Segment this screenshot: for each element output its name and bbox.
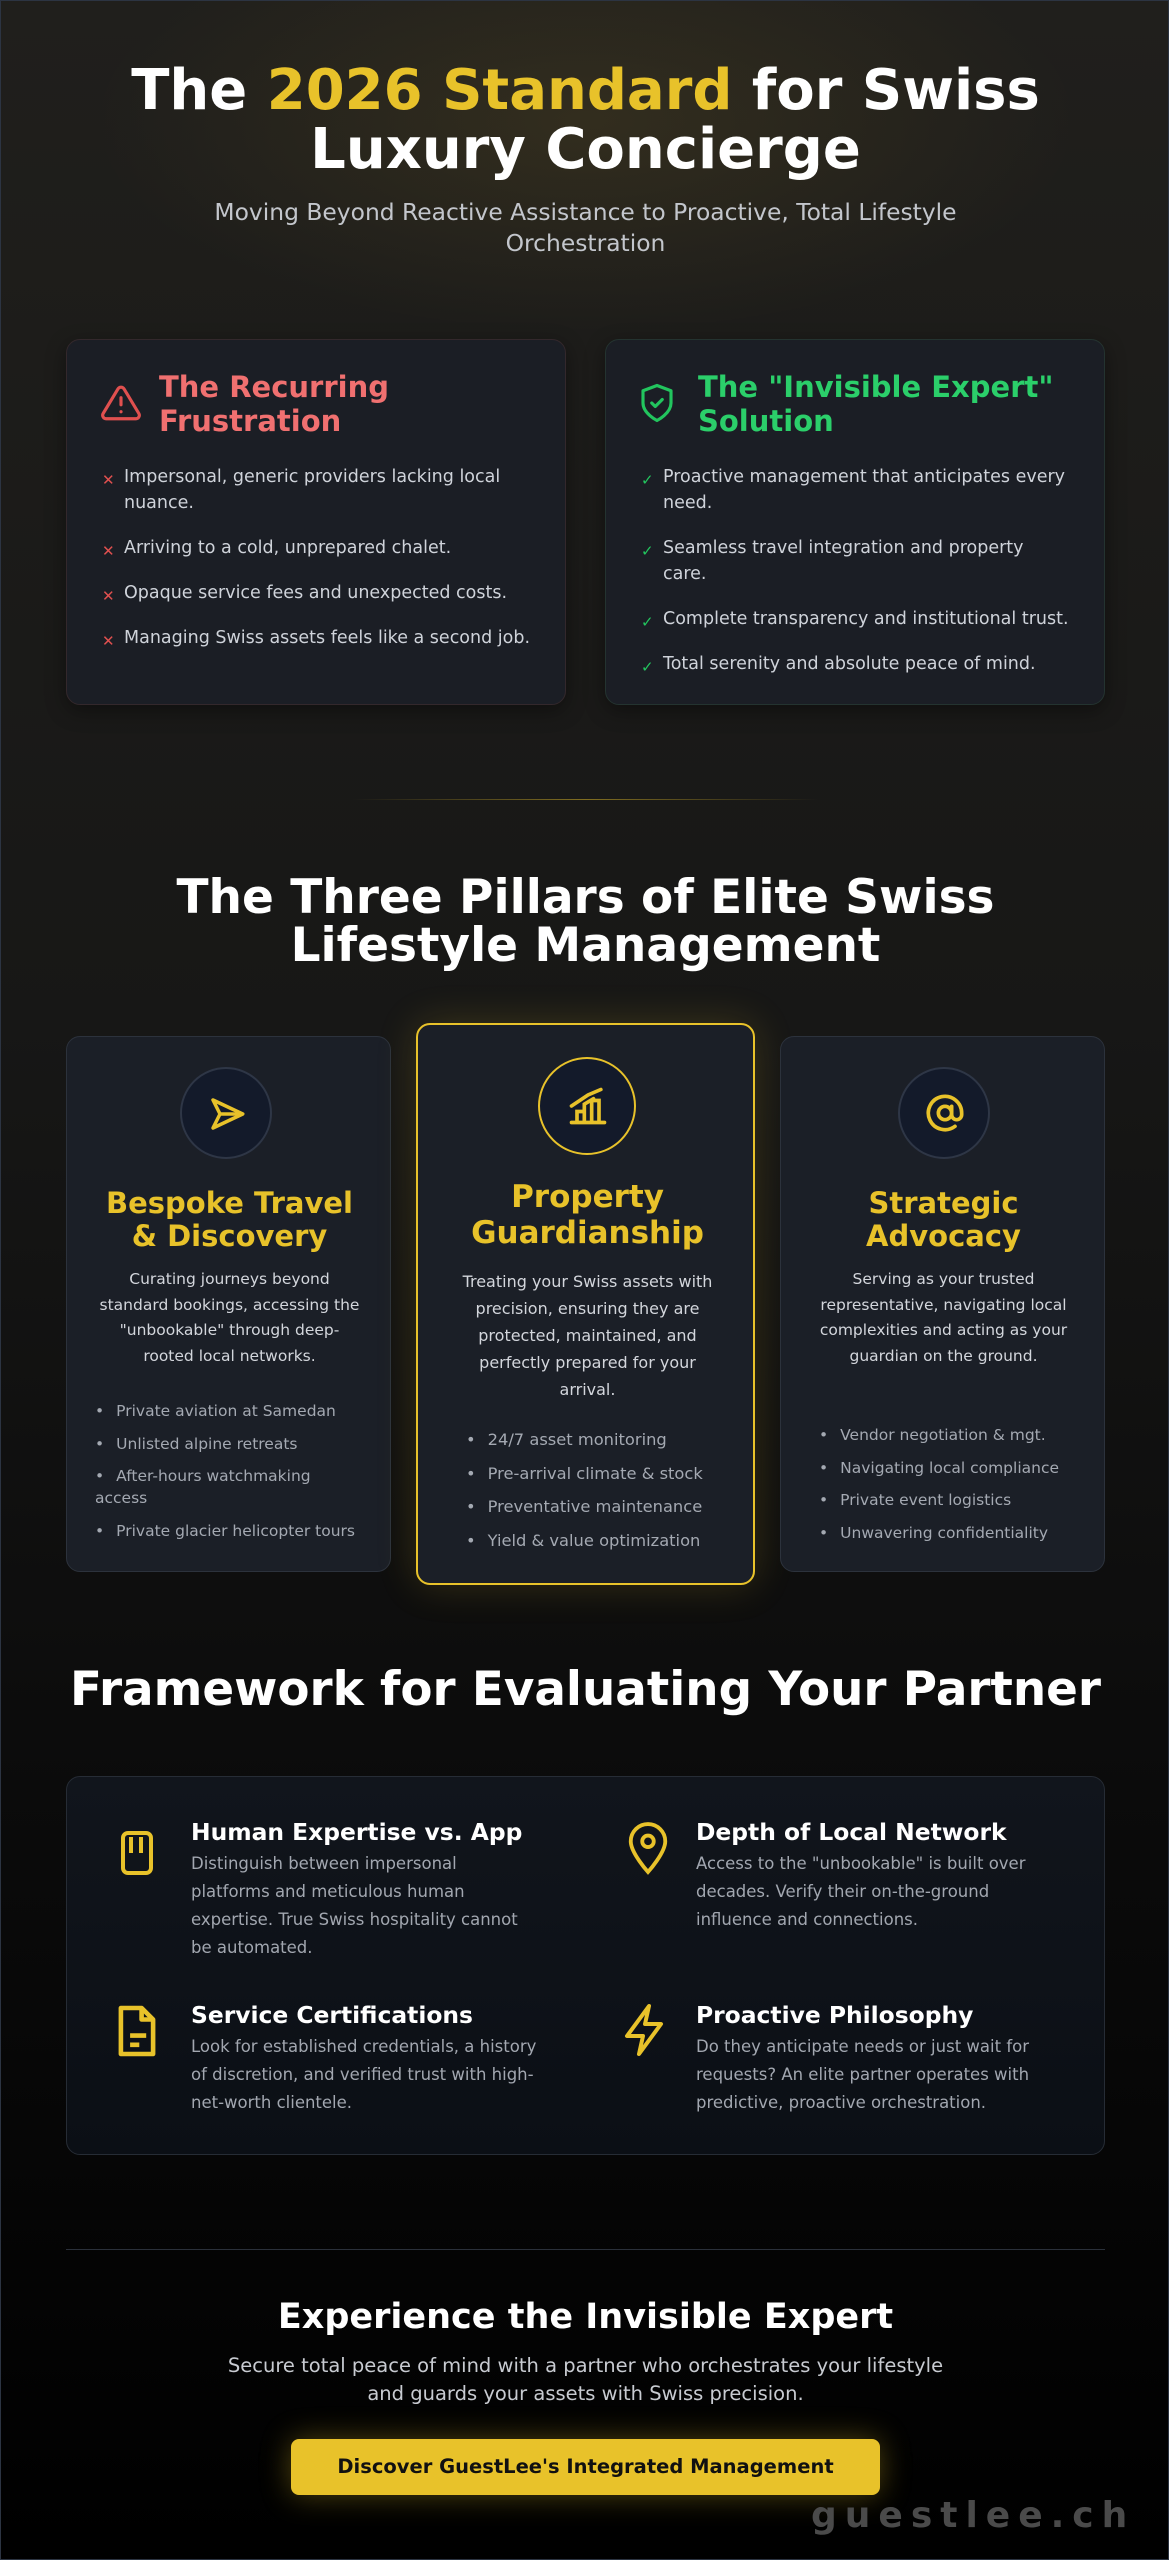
icon: warning triangle bbox=[101, 386, 141, 420]
panel: framework: Do they anticipate needs or just wait for bbox=[696, 2037, 1029, 2056]
heading: Advocacy bbox=[866, 1219, 1021, 1253]
list bbox=[821, 1426, 1059, 1542]
panel: framework: platforms and meticulous human bbox=[191, 1882, 465, 1901]
heading: & Discovery bbox=[132, 1219, 327, 1253]
panel: bespoke travel bbox=[66, 1036, 391, 1572]
heading: three pillars: The Three Pillars of Elite Swiss bbox=[176, 870, 995, 925]
cta button: Discover GuestLee's Integrated Management bbox=[337, 2455, 834, 2478]
icon: phone bbox=[121, 1831, 153, 1875]
title bbox=[131, 58, 1040, 182]
item: certifications bbox=[118, 2001, 536, 2112]
icon: document bbox=[118, 2006, 156, 2056]
icon: send bbox=[180, 1067, 272, 1159]
heading bbox=[106, 1186, 353, 1253]
list bbox=[102, 467, 530, 650]
panel: framework bbox=[66, 1776, 1105, 2155]
list: Unwavering confidentiality bbox=[840, 1524, 1048, 1542]
panel: recurring frustration: ✕ bbox=[102, 587, 115, 605]
list bbox=[95, 1402, 355, 1540]
icon: lightning bbox=[624, 2004, 664, 2056]
list: Impersonal, generic providers lacking local nuance. bbox=[124, 467, 500, 513]
list: Vendor negotiation & mgt. bbox=[840, 1426, 1046, 1444]
panel: invisible expert solution: ✓ bbox=[641, 471, 654, 489]
panel: framework: Service Certifications bbox=[191, 2001, 473, 2029]
panel: framework: Proactive Philosophy bbox=[696, 2001, 973, 2029]
heading: Bespoke Travel bbox=[106, 1186, 353, 1220]
panel: framework: net-worth clientele. bbox=[191, 2093, 352, 2112]
panel: recurring frustration bbox=[66, 339, 566, 705]
heading: three pillars: Lifestyle Management bbox=[291, 918, 880, 973]
item: local network bbox=[628, 1818, 1026, 1929]
panel: framework: Depth of Local Network bbox=[696, 1818, 1007, 1846]
heading: Strategic bbox=[868, 1186, 1019, 1220]
panel: strategic advocacy bbox=[780, 1036, 1105, 1572]
list: Total serenity and absolute peace of mind. bbox=[663, 654, 1036, 674]
icon: map pin bbox=[628, 1822, 668, 1875]
panel: framework: influence and connections. bbox=[696, 1910, 918, 1929]
panel: invisible expert solution bbox=[605, 339, 1105, 705]
list: Private aviation at Samedan bbox=[116, 1402, 336, 1420]
title: The 2026 Standard for Swiss bbox=[131, 58, 1040, 123]
description: Serving as your trusted representative, navigating local complexities and acting as your guardian on the ground. bbox=[820, 1270, 1067, 1364]
list: Yield & value optimization bbox=[488, 1530, 700, 1550]
list: access bbox=[95, 1489, 147, 1507]
title: Luxury Concierge bbox=[310, 117, 861, 182]
list: Pre-arrival climate & stock bbox=[488, 1464, 703, 1482]
panel: invisible expert solution: ✓ bbox=[641, 658, 654, 676]
list bbox=[641, 467, 1069, 676]
list: Complete transparency and institutional trust. bbox=[663, 609, 1069, 629]
heading: Solution bbox=[698, 404, 834, 438]
heading: Guardianship bbox=[471, 1215, 704, 1251]
list: Opaque service fees and unexpected costs. bbox=[124, 583, 507, 603]
panel: invisible expert solution: ✓ bbox=[641, 542, 654, 560]
list: Preventative maintenance bbox=[488, 1497, 702, 1516]
list: Navigating local compliance bbox=[840, 1458, 1059, 1476]
panel: framework: of discretion, and verified trust with high- bbox=[191, 2065, 534, 2084]
cta text bbox=[228, 2354, 943, 2405]
heading: Property bbox=[511, 1179, 664, 1215]
cta button bbox=[291, 2439, 880, 2495]
panel: framework: requests? An elite partner operates with bbox=[696, 2065, 1029, 2084]
description: Treating your Swiss assets with precision, ensuring they are protected, maintained, and perfectly prepared for your arrival. bbox=[463, 1272, 712, 1399]
panel: framework: decades. Verify their on-the-ground bbox=[696, 1882, 989, 1901]
heading bbox=[866, 1186, 1021, 1253]
heading: The Recurring bbox=[159, 370, 389, 404]
icon: building bbox=[538, 1057, 636, 1155]
heading: The "Invisible Expert" bbox=[698, 370, 1053, 404]
heading: Frustration bbox=[159, 404, 341, 438]
panel: framework: Distinguish between impersonal bbox=[191, 1854, 457, 1873]
list: Private event logistics bbox=[840, 1491, 1011, 1509]
cta text: and guards your assets with Swiss precision. bbox=[367, 2382, 804, 2405]
list: Managing Swiss assets feels like a second job. bbox=[124, 628, 530, 648]
subtitle bbox=[214, 198, 957, 257]
item: proactive philosophy bbox=[624, 2001, 1029, 2112]
panel: property guardianship bbox=[416, 1023, 755, 1585]
list: 24/7 asset monitoring bbox=[488, 1430, 667, 1449]
panel: framework: Look for established credentials, a history bbox=[191, 2037, 536, 2056]
panel: recurring frustration: ✕ bbox=[102, 632, 115, 650]
list: Seamless travel integration and property care. bbox=[663, 538, 1024, 584]
panel: framework: predictive, proactive orchestration. bbox=[696, 2093, 986, 2112]
cta heading: Experience the Invisible Expert bbox=[278, 2297, 893, 2337]
watermark: guestlee.ch bbox=[811, 2495, 1135, 2536]
heading bbox=[471, 1179, 704, 1251]
panel: invisible expert solution: ✓ bbox=[641, 613, 654, 631]
list: Arriving to a cold, unprepared chalet. bbox=[124, 538, 451, 558]
list: After-hours watchmaking bbox=[116, 1467, 311, 1485]
panel: framework: be automated. bbox=[191, 1938, 313, 1957]
heading bbox=[159, 370, 389, 438]
heading bbox=[698, 370, 1053, 438]
description: Curating journeys beyond standard bookings, accessing the "unbookable" through deep-rooted local networks. bbox=[100, 1270, 359, 1364]
heading: framework: Framework for Evaluating Your Partner bbox=[70, 1663, 1101, 1717]
item: human expertise bbox=[121, 1818, 522, 1957]
list bbox=[468, 1430, 703, 1550]
subtitle: Moving Beyond Reactive Assistance to Proactive, Total Lifestyle bbox=[214, 198, 957, 226]
list: Unlisted alpine retreats bbox=[116, 1434, 298, 1452]
panel: framework: Human Expertise vs. App bbox=[191, 1818, 522, 1846]
list: Private glacier helicopter tours bbox=[116, 1522, 355, 1540]
icon: at sign bbox=[898, 1067, 990, 1159]
cta text: Secure total peace of mind with a partner who orchestrates your lifestyle bbox=[228, 2354, 943, 2377]
subtitle: Orchestration bbox=[506, 229, 665, 257]
panel: recurring frustration: ✕ bbox=[102, 471, 115, 489]
icon: shield check bbox=[641, 384, 673, 422]
panel: framework: expertise. True Swiss hospitality cannot bbox=[191, 1910, 518, 1929]
list: Proactive management that anticipates every need. bbox=[663, 467, 1065, 513]
heading: three pillars bbox=[176, 870, 995, 973]
panel: recurring frustration: ✕ bbox=[102, 542, 115, 560]
panel: framework: Access to the "unbookable" is built over bbox=[696, 1854, 1025, 1873]
